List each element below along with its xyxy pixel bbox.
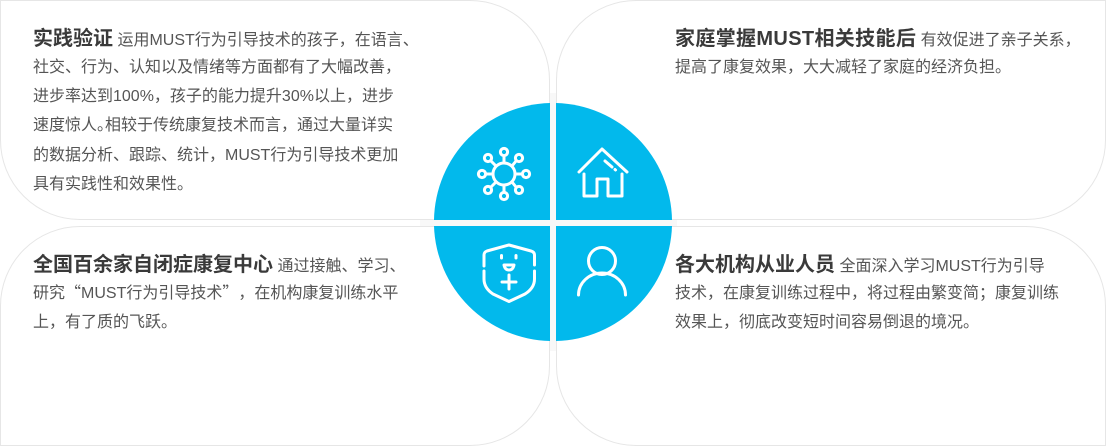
text: practical verification: 的数据分析、跟踪、统计，MUST行为引导技术更加 bbox=[33, 147, 398, 164]
center icon circle bbox=[434, 103, 672, 341]
text: institution staff: 技术，在康复训练过程中，将过程由繁变简；康复训练 bbox=[675, 285, 1059, 302]
panel: top left bbox=[0, 0, 550, 220]
text: institution staff: 各大机构从业人员 全面深入学习MUST行为引导 bbox=[675, 254, 1045, 276]
text: institution staff bbox=[675, 254, 1059, 331]
quadrant: top right bbox=[556, 103, 672, 220]
quadrant: top left bbox=[434, 103, 550, 220]
text: practical verification: 具有实践性和效果性。 bbox=[33, 176, 193, 193]
text: practical verification: 实践验证 运用MUST行为引导技术的孩子，在语言、 bbox=[33, 28, 419, 50]
text: practical verification: 社交、行为、认知以及情绪等方面都有了大幅改善， bbox=[33, 59, 401, 76]
text: family skills bbox=[675, 28, 1081, 76]
icon: house bbox=[579, 149, 627, 196]
text: practical verification: 进步率达到100%，孩子的能力提升30%以上，进步 bbox=[33, 88, 394, 105]
text: rehabilitation centers: ” bbox=[222, 279, 238, 303]
text: practical verification bbox=[33, 28, 419, 193]
text: rehabilitation centers: 上，有了质的飞跃。 bbox=[33, 314, 177, 331]
panel: bottom right bbox=[556, 226, 1106, 446]
icon: smiling shield with plus bbox=[484, 245, 534, 302]
icon: molecule network bbox=[478, 148, 530, 200]
quadrant: bottom right bbox=[556, 226, 672, 341]
text: rehabilitation centers bbox=[33, 254, 405, 331]
quadrant: bottom left bbox=[434, 226, 550, 341]
text: rehabilitation centers: 研究 MUST行为引导技术 ，在机构康复训练水平 bbox=[33, 285, 398, 302]
panel: top right bbox=[556, 0, 1106, 220]
text: practical verification: 速度惊人。相较于传统康复技术而言，通过大量详实 bbox=[33, 117, 393, 134]
text: institution staff: 效果上，彻底改变短时间容易倒退的境况。 bbox=[675, 314, 979, 331]
text: family skills: 家庭掌握MUST相关技能后 有效促进了亲子关系， bbox=[675, 28, 1081, 50]
text: rehabilitation centers: “ bbox=[65, 279, 81, 303]
icon: person bbox=[578, 248, 626, 295]
text: family skills: 提高了康复效果，大大减轻了家庭的经济负担。 bbox=[675, 59, 1011, 76]
panel: bottom left bbox=[0, 226, 550, 446]
text: rehabilitation centers: 全国百余家自闭症康复中心 通过接触、学习、 bbox=[33, 254, 405, 276]
